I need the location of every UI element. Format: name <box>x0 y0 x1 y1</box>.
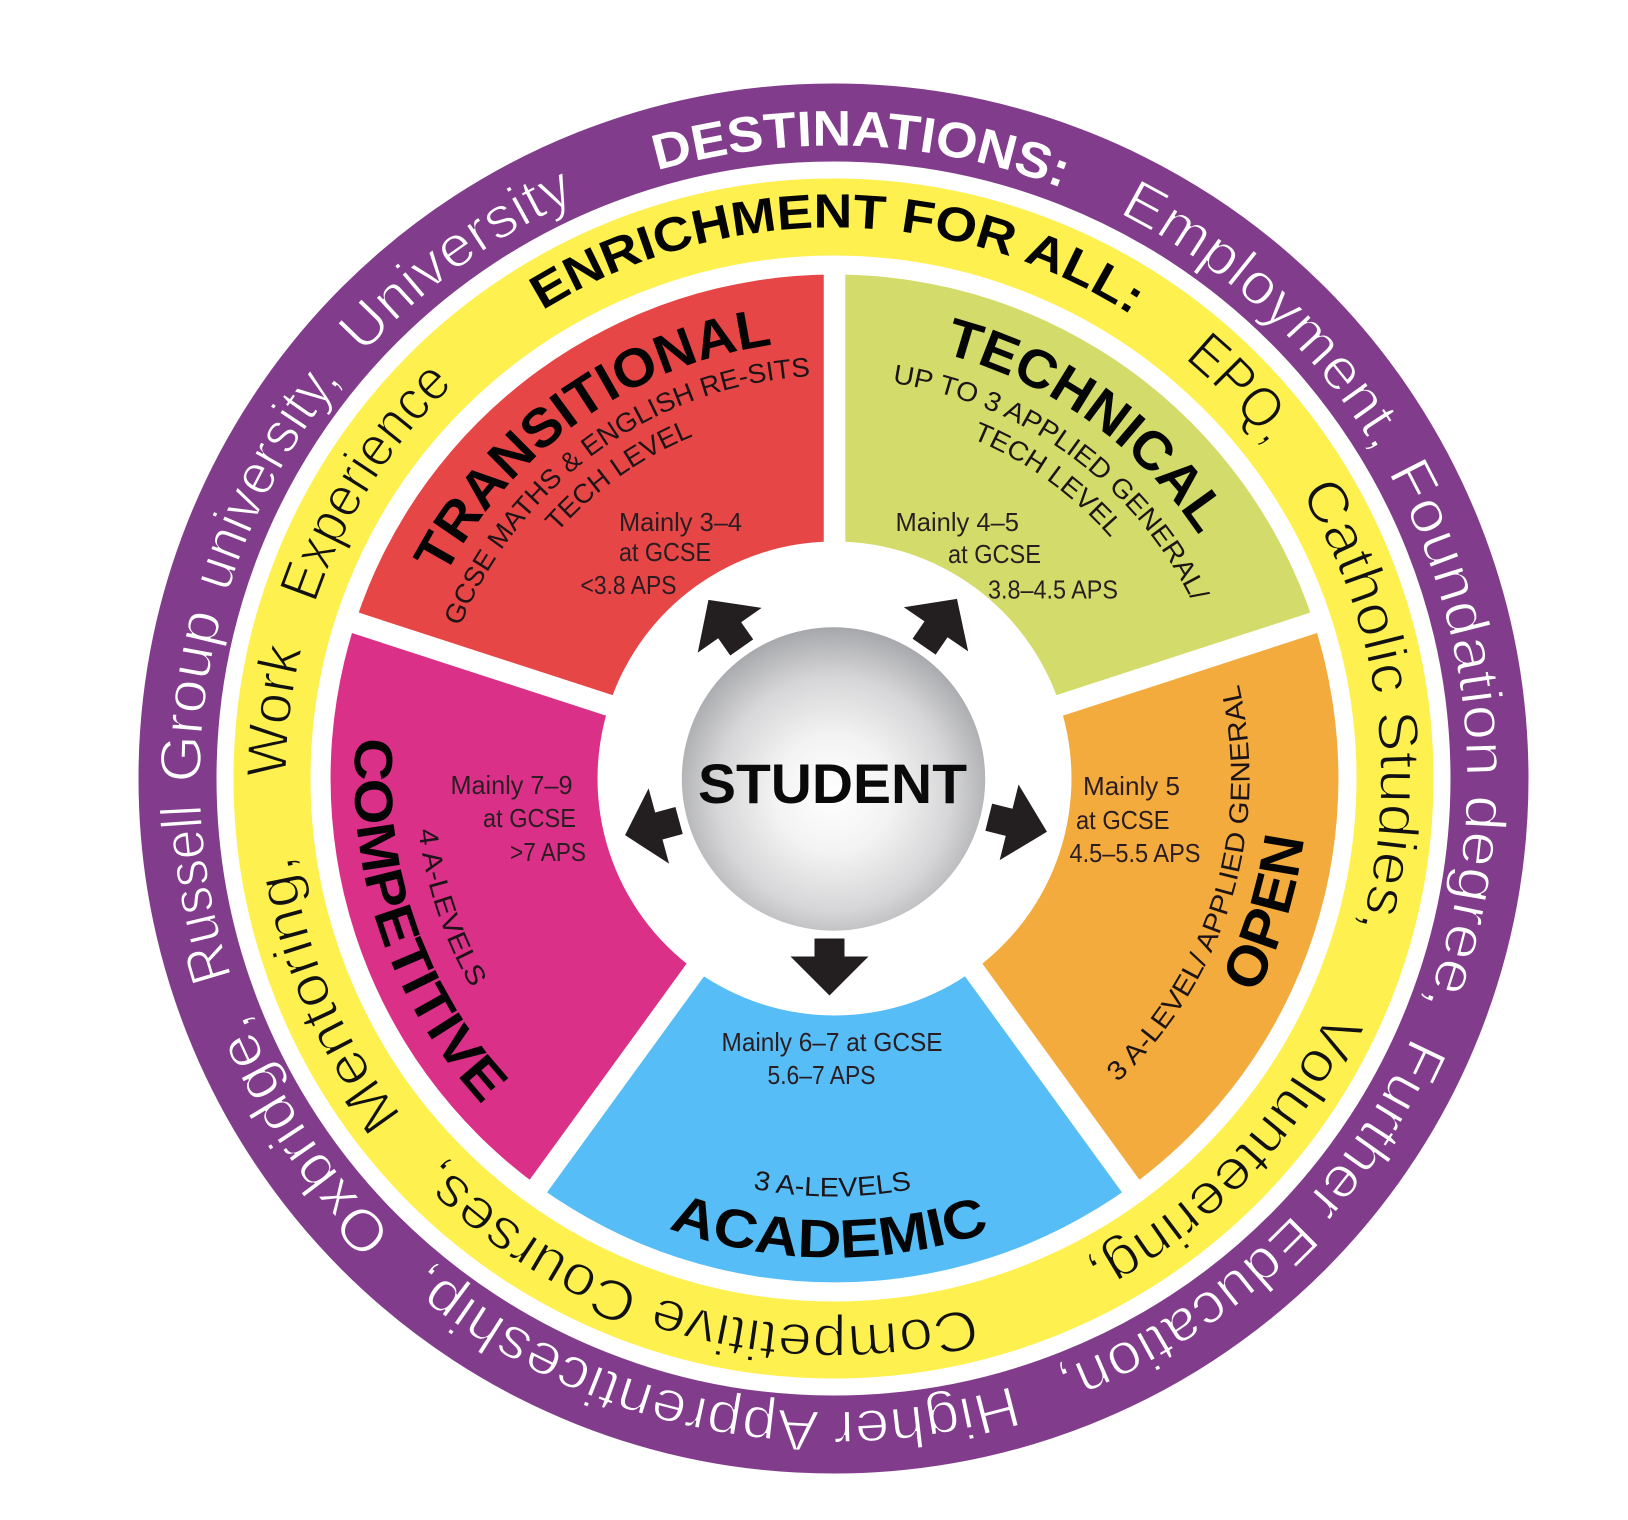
heading: technical: TECHNICAL <box>953 318 1216 534</box>
label: oxbridge: Oxbridge, <box>230 1018 383 1252</box>
arrow: to academic <box>790 938 868 996</box>
transitional text <box>412 312 809 623</box>
label: foundation degree: Foundation degree, <box>1390 459 1506 1001</box>
grades: competitive: >7 APS <box>510 837 586 867</box>
technical text <box>895 318 1216 598</box>
arrow: to open <box>979 779 1056 870</box>
label: catholic studies: Catholic Studies, <box>1308 482 1419 924</box>
enrichment ring text <box>248 194 1419 1360</box>
label: mentoring: Mentoring, <box>266 860 398 1134</box>
heading: student: STUDENT <box>698 752 967 815</box>
academic text <box>670 1171 986 1258</box>
heading: destinations: DESTINATIONS: <box>652 111 1066 186</box>
subtitle: 4 A-levels: 4 A-LEVELS <box>420 830 486 985</box>
segment: academic <box>538 970 1131 1282</box>
ring: enrichment band <box>272 217 1395 1340</box>
grades: transitional: <3.8 APS <box>580 570 676 600</box>
heading: competitive: COMPETITIVE <box>354 740 508 1104</box>
label: volunteering: Volunteering, <box>1089 1026 1364 1280</box>
grades: transitional <box>580 507 742 600</box>
subtitle: 3 A-levels: 3 A-LEVELS <box>754 1171 910 1196</box>
label: university: University <box>338 174 564 345</box>
grades: technical <box>896 507 1118 604</box>
arrow: to transitional <box>677 578 774 670</box>
heading: enrichment for all: ENRICHMENT FOR ALL: <box>528 194 1140 312</box>
label: competitive courses: Competitive Courses, <box>437 1159 974 1360</box>
subtitle: up to 3 applied general: UP TO 3 APPLIED GENERAL/ <box>895 364 1210 598</box>
segment: technical <box>834 274 1314 705</box>
grades: open: 4.5–5.5 APS <box>1070 838 1200 868</box>
sphere <box>682 627 985 931</box>
grades: technical: Mainly 4–5 <box>896 507 1019 537</box>
grades: academic: 5.6–7 APS <box>768 1060 876 1090</box>
grades: transitional: at GCSE <box>619 537 711 567</box>
grades: academic <box>722 1027 942 1090</box>
destinations ring text <box>160 111 1506 1450</box>
heading: transitional: TRANSITIONAL <box>412 312 771 565</box>
segment: transitional <box>355 274 834 705</box>
grades: transitional: Mainly 3–4 <box>619 507 742 537</box>
label: employment: Employment, <box>1124 181 1394 450</box>
grades: technical: 3.8–4.5 APS <box>988 574 1118 604</box>
label: russell: Russell <box>160 808 230 984</box>
label: higher apprenticeship: Higher Apprenticeship, <box>428 1264 1018 1450</box>
label: university comma: university, <box>201 372 342 587</box>
grades: open: Mainly 5 <box>1083 771 1180 801</box>
arrow: to technical <box>892 577 989 669</box>
open text <box>1108 685 1304 1080</box>
label: experience: Experience <box>280 370 448 600</box>
label: group: Group <box>161 614 227 779</box>
segments <box>331 268 1338 1282</box>
grades: open <box>1070 771 1200 868</box>
ring: destinations band <box>178 122 1490 1434</box>
heading: academic: ACADEMIC <box>670 1198 986 1258</box>
grades: competitive: Mainly 7–9 <box>450 770 572 800</box>
grades: open: at GCSE <box>1076 805 1170 835</box>
label: further education: Further Education, <box>1060 1041 1445 1389</box>
subtitle: 3 A-level / applied general: 3 A-LEVEL/ APPLIED GENERAL <box>1108 685 1250 1080</box>
grades: technical: at GCSE <box>948 539 1041 569</box>
segment gaps <box>350 268 1320 1191</box>
subtitle: GCSE maths and English: GCSE MATHS & ENGLISH RE-SITS <box>446 358 809 623</box>
subtitle: tech level: TECH LEVEL <box>978 422 1118 538</box>
subtitle: tech level: TECH LEVEL <box>544 423 692 528</box>
competitive text <box>354 740 508 1104</box>
label: work: Work <box>248 645 301 775</box>
segment: competitive <box>331 623 695 1186</box>
grades: competitive: at GCSE <box>483 803 576 833</box>
grades: academic: Mainly 6–7 at GCSE <box>722 1027 942 1057</box>
label: EPQ: EPQ, <box>1188 332 1280 445</box>
grades: competitive <box>450 770 586 867</box>
arrow: to competitive <box>615 783 689 873</box>
heading: open: OPEN <box>1227 835 1304 986</box>
segment: open <box>974 623 1338 1186</box>
